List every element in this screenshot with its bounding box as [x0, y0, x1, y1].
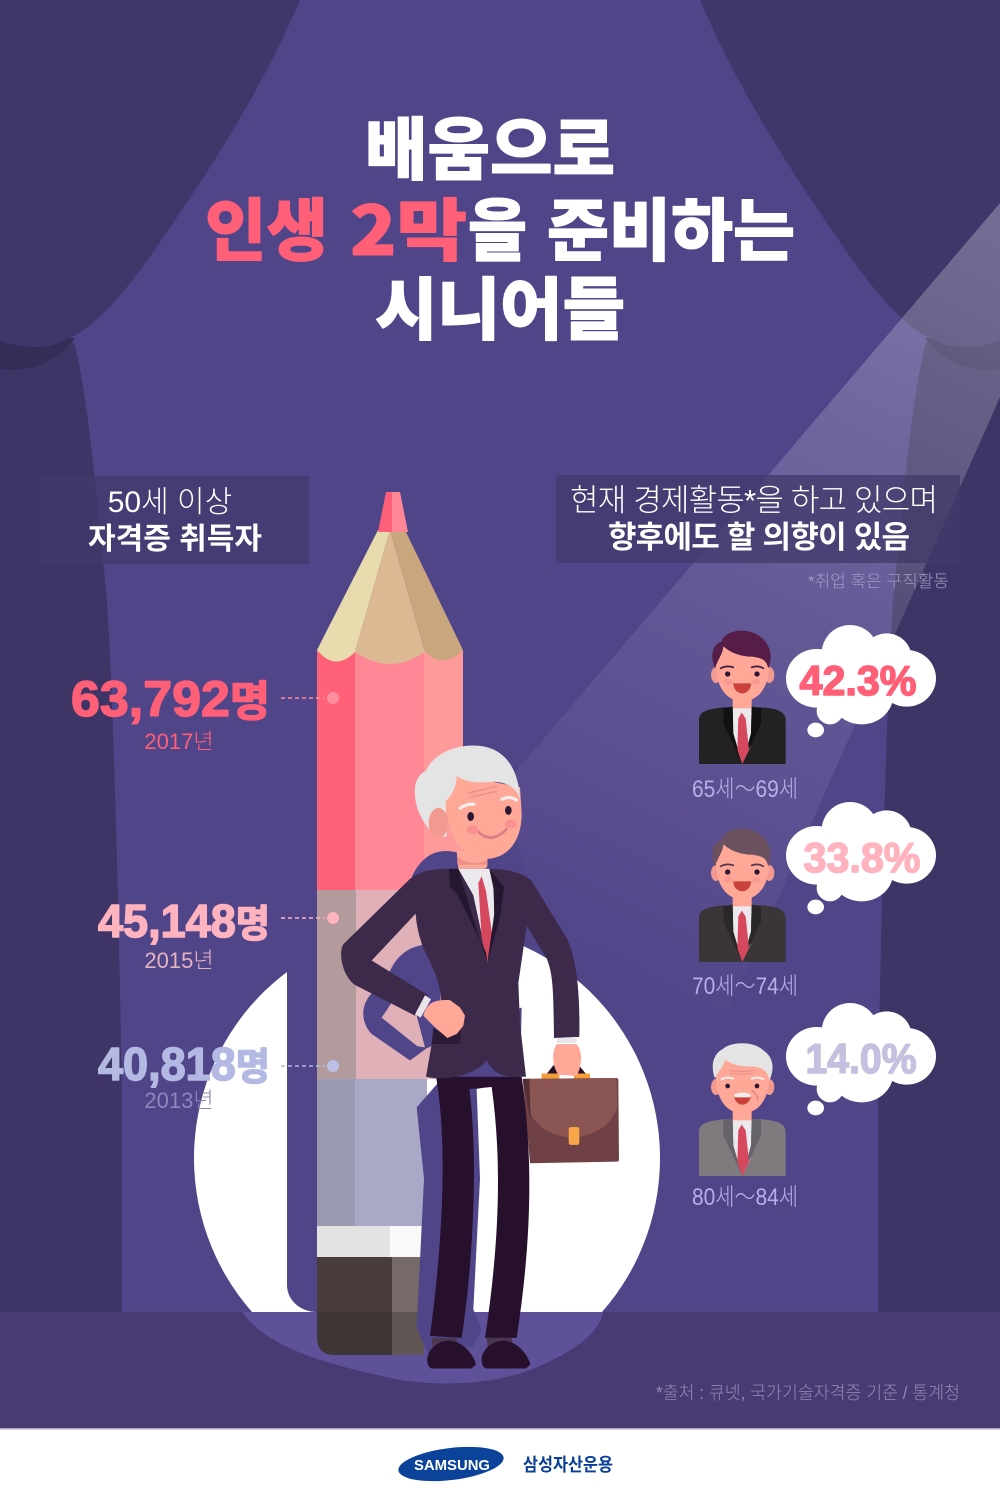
curtain: top left [0, 0, 300, 370]
thought bubble: 14.0%: 14.0% [806, 1035, 916, 1082]
age label: 70-74: 70세～74세 [692, 973, 798, 1000]
panel: left heading [40, 476, 309, 564]
jacket [341, 869, 579, 1078]
title line 2 [205, 176, 795, 275]
title line 2: 인생 [205, 176, 328, 275]
pencil eraser [317, 1257, 424, 1355]
panel: right heading [556, 475, 960, 563]
person: 80-84 [699, 1043, 786, 1176]
man shadow [363, 851, 522, 1354]
source note: *출처 : 큐넷, 국가기술자격증 기준 / 통계청 [656, 1383, 960, 1403]
briefcase [523, 1065, 619, 1163]
trousers [430, 1077, 529, 1338]
stat: 2015 [98, 895, 339, 973]
logo: Samsung: SAMSUNG [414, 1457, 490, 1474]
segment: 2015 pink [317, 890, 446, 1079]
thought bubble: 33.8%: 33.8% [804, 834, 920, 881]
spotlight beam [500, 203, 1000, 1210]
spotlight circle on stage [194, 925, 660, 1312]
jacket pocket [432, 1028, 461, 1044]
logo: Samsung [396, 1442, 506, 1486]
stat: 2017: 2017년 [144, 729, 214, 754]
stat: 2015: 2015년 [144, 948, 214, 973]
head [415, 746, 522, 865]
thought bubble: 33.8% [786, 802, 936, 914]
shirt and tie [449, 869, 504, 963]
title [205, 95, 795, 354]
pencil shadow [287, 920, 340, 1312]
panel: right heading: 향후에도 할 의향이 있음 [608, 520, 910, 555]
panel: left heading: 50세 이상 [108, 486, 232, 519]
title line 2: 준비하는 [547, 176, 795, 275]
pencil lead [378, 492, 408, 532]
pencil wood tip [317, 530, 463, 664]
person: 65-69 [699, 631, 786, 764]
title line 2: 2막 [350, 176, 467, 275]
thought bubble: 42.3% [786, 625, 936, 737]
segment: 2017 red [317, 650, 463, 890]
stat: 2013: 2013년 [144, 1088, 214, 1113]
footer [0, 1428, 1000, 1500]
pencil ferrule [317, 1226, 427, 1257]
thought bubble: 42.3%: 42.3% [800, 657, 916, 704]
stat: 2017: 63,792명 [71, 671, 270, 727]
thought bubble: 14.0% [786, 1003, 936, 1115]
stat: 2013 [98, 1038, 339, 1113]
title line 1: 배움으로 [365, 95, 615, 194]
panel: right heading: 현재 경제활동*을 하고 있으며 [570, 483, 938, 518]
stat: 2015: 45,148명 [98, 895, 270, 947]
shoes [427, 1341, 530, 1369]
stage floor [0, 1312, 1000, 1428]
neck [457, 850, 487, 877]
pencil bar chart [317, 492, 463, 1355]
segment: 2013 lavender [317, 1079, 427, 1226]
left hand and cuff [415, 995, 465, 1038]
businessman [341, 746, 619, 1369]
footnote: definition: *취업 혹은 구직활동 [808, 572, 949, 591]
title line 3: 시니어들 [375, 255, 625, 354]
title line 2: 을 [468, 176, 527, 275]
stat: 2017 [71, 671, 339, 754]
logo text: 삼성자산운용 [523, 1455, 613, 1475]
stat: 2013: 40,818명 [98, 1038, 270, 1090]
curtain: top right [700, 0, 1000, 370]
right hand and cuff [553, 1038, 581, 1076]
person: 70-74 [699, 829, 786, 962]
age label: 65-69: 65세～69세 [692, 776, 798, 803]
age label: 80-84: 80세～84세 [692, 1184, 798, 1211]
panel: left heading: 자격증 취득자 [88, 523, 262, 556]
socks [432, 1338, 513, 1354]
